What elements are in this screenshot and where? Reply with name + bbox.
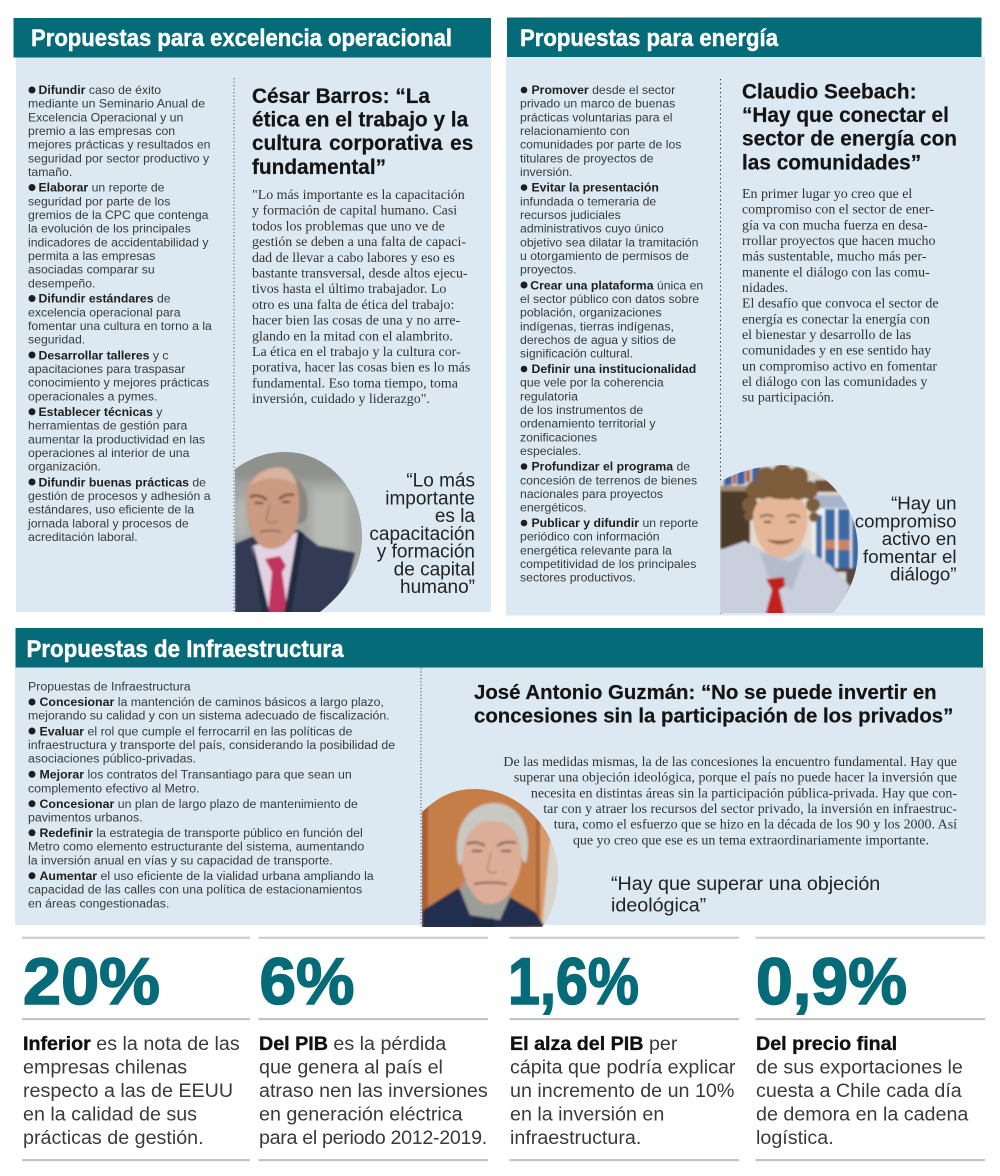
proposals list: energía: Definir una institucionalidad bbox=[532, 362, 696, 376]
proposals list: excelencia operacional: premio a las empresas con bbox=[28, 124, 175, 138]
quote text: Claudio Seebach: energía es conectar la energía con bbox=[742, 312, 930, 327]
quote text: César Barros: bastante transversal, desde altos ejecu- bbox=[252, 266, 468, 282]
pull quote: José Antonio Guzmán: “Hay que superar una objeción bbox=[611, 873, 880, 895]
stat: 0,9%: Del precio final bbox=[756, 1033, 897, 1055]
proposals list: infraestructura: mejorando su calidad y con un sistema adecuado de fiscalización. bbox=[28, 709, 390, 723]
pull quote: Claudio Seebach: compromiso bbox=[855, 510, 956, 531]
quote text: Claudio Seebach: su participación. bbox=[742, 391, 834, 406]
proposals list: excelencia operacional: operaciones al interior de una bbox=[28, 446, 190, 460]
proposals list: energía: prácticas voluntarias para el bbox=[520, 110, 673, 124]
stat: 6%: Del PIB es la pérdida bbox=[259, 1033, 446, 1055]
quote text: César Barros: fundamental. Eso toma tiempo, toma bbox=[252, 376, 458, 391]
pull quote: César Barros: capacitación bbox=[369, 524, 475, 545]
proposals list: infraestructura: Concesionar la mantención de caminos básicos a largo plazo, bbox=[40, 695, 384, 709]
proposals list: excelencia operacional: Difundir buenas prácticas de bbox=[38, 475, 206, 489]
quote text: César Barros: gestión se deben a una falta de capaci- bbox=[252, 235, 466, 250]
proposals list: energía: Crear una plataforma única en bbox=[530, 278, 703, 292]
stat: 6%: 6% bbox=[260, 944, 354, 1018]
proposals list: excelencia operacional: asociadas comparar su bbox=[28, 263, 155, 277]
stat: 20% bbox=[22, 937, 250, 1161]
quote text: César Barros: "Lo más importante es la capacitación bbox=[252, 188, 465, 203]
heading: excelencia operacional: Propuestas para excelencia operacional bbox=[31, 25, 452, 52]
proposals list: excelencia operacional: mediante un Seminario Anual de bbox=[28, 97, 205, 111]
proposals list: infraestructura: asociaciones público-privadas. bbox=[28, 752, 196, 766]
heading: energía: Propuestas para energía bbox=[520, 25, 779, 52]
pull quote: Claudio Seebach: “Hay un bbox=[891, 492, 956, 514]
heading: infraestructura bbox=[16, 628, 983, 668]
proposals list: energía: infundada o temeraria de bbox=[520, 194, 656, 208]
proposals list: energía: ordenamiento territorial y bbox=[520, 417, 656, 431]
proposals list: excelencia operacional: fomentar una cultura en torno a la bbox=[28, 319, 212, 333]
stat: 20%: en la calidad de sus bbox=[23, 1104, 197, 1126]
stat: 1,6%: El alza del PIB per bbox=[510, 1033, 677, 1055]
stat: 1,6% bbox=[508, 937, 739, 1161]
proposals list: energía: competitividad de los principales bbox=[520, 557, 696, 571]
proposals list: energía: titulares de proyectos de bbox=[520, 151, 654, 165]
quote text: José Antonio Guzmán: tar con y atraer los recursos del sector privado, la inversión en infraestruc- bbox=[543, 802, 957, 817]
panel: energía bbox=[506, 18, 985, 620]
stat: 1,6%: en la inversión en bbox=[510, 1104, 664, 1126]
proposals list: infraestructura: capacidad de las calles con una política de estacionamientos bbox=[28, 883, 362, 897]
headline: César Barros: cultura corporativa es bbox=[252, 132, 473, 155]
proposals list: infraestructura: pavimentos urbanos. bbox=[28, 811, 143, 825]
stat: 0,9% bbox=[756, 937, 985, 1161]
proposals list: infraestructura: Concesionar un plan de largo plazo de mantenimiento de bbox=[40, 797, 358, 811]
proposals list: excelencia operacional: estándares, uso eficiente de la bbox=[28, 503, 194, 517]
quote text: José Antonio Guzmán: superar una objeción ideológica, porque el país no puede hacer la inversión que bbox=[514, 771, 957, 786]
proposals list: excelencia operacional: excelencia operacional para bbox=[28, 305, 181, 319]
stat: 6%: que genera al país el bbox=[259, 1056, 443, 1078]
proposals list: infraestructura: en áreas congestionadas. bbox=[28, 896, 169, 910]
panel: infraestructura bbox=[15, 628, 986, 931]
proposals list: energía: objetivo sea dilatar la tramitación bbox=[520, 235, 699, 249]
proposals list: energía: relacionamiento con bbox=[520, 124, 630, 138]
headline: César Barros: César Barros: “La bbox=[252, 85, 430, 108]
headline: José Antonio Guzmán: José Antonio Guzmán: “No se puede invertir en bbox=[474, 682, 937, 704]
stat: 6% bbox=[258, 937, 488, 1161]
proposals list: infraestructura: la inversión anual en vías y su capacidad de transporte. bbox=[28, 853, 333, 867]
proposals list: excelencia operacional: organización. bbox=[28, 460, 101, 474]
proposals list: infraestructura bbox=[28, 679, 395, 910]
stat: 6%: atraso nen las inversiones bbox=[259, 1080, 488, 1102]
stat: 0,9%: de sus exportaciones le bbox=[756, 1056, 963, 1078]
heading: infraestructura: Propuestas de Infraestructura bbox=[26, 636, 344, 663]
headline: Claudio Seebach: sector de energía con bbox=[742, 128, 957, 151]
proposals list: excelencia operacional: aumentar la productividad en las bbox=[28, 432, 205, 446]
proposals list: infraestructura: Mejorar los contratos del Transantiago para que sean un bbox=[40, 768, 352, 782]
photo: César Barros bbox=[235, 452, 362, 612]
stat: 1,6%: cápita que podría explicar bbox=[510, 1056, 736, 1078]
proposals list: energía: zonificaciones bbox=[520, 430, 597, 444]
proposals list: energía: nacionales para proyectos bbox=[520, 487, 663, 501]
quote text: César Barros: tivos hasta el último trabajador. Lo bbox=[252, 282, 446, 297]
quote text: César Barros: hacer bien las cosas de una y no arre- bbox=[252, 314, 461, 329]
quote text: César Barros: La ética en el trabajo y la cultura cor- bbox=[252, 345, 461, 360]
stat: 6%: para el periodo 2012-2019. bbox=[259, 1127, 487, 1149]
proposals list: energía: Evitar la presentación bbox=[532, 181, 659, 195]
pull quote: César Barros: y formación bbox=[377, 542, 475, 562]
pull quote: César Barros: humano” bbox=[400, 577, 475, 598]
proposals list: energía: de los instrumentos de bbox=[520, 403, 643, 417]
quote text: Claudio Seebach: El desafío que convoca el sector de bbox=[742, 297, 939, 312]
proposals list: energía: energéticos. bbox=[520, 501, 587, 515]
proposals list: excelencia operacional: gestión de procesos y adhesión a bbox=[28, 489, 211, 503]
proposals list: energía: que vele por la coherencia bbox=[520, 376, 664, 390]
proposals list: energía: indígenas, tierras indígenas, bbox=[520, 319, 674, 333]
proposals list: energía: privado un marco de buenas bbox=[520, 97, 675, 111]
proposals list: infraestructura: Redefinir la estrategia de transporte público en función del bbox=[40, 826, 363, 840]
stat: 1,6%: 1,6% bbox=[508, 944, 639, 1018]
proposals list: energía: administrativos cuyo único bbox=[520, 222, 664, 236]
proposals list: energía: Profundizar el programa de bbox=[532, 460, 690, 474]
proposals list: excelencia operacional bbox=[27, 83, 212, 544]
quote text: César Barros: porativa, hacer las cosas bien es lo más bbox=[252, 361, 470, 376]
proposals list: energía: especiales. bbox=[520, 444, 581, 458]
proposals list: excelencia operacional: Establecer técnicas y bbox=[38, 405, 162, 419]
proposals list: energía: proyectos. bbox=[520, 263, 577, 277]
pull quote: Claudio Seebach: activo en bbox=[882, 528, 956, 549]
proposals list: excelencia operacional: gremios de la CPC que contenga bbox=[28, 208, 209, 222]
proposals list: energía: recursos judiciales bbox=[520, 208, 621, 222]
proposals list: energía: el sector público con datos sobre bbox=[520, 292, 699, 306]
proposals list: energía: periódico con información bbox=[520, 530, 660, 544]
proposals list: excelencia operacional: desempeño. bbox=[28, 276, 95, 290]
photo: José Antonio Guzmán bbox=[422, 789, 558, 927]
headline: José Antonio Guzmán: concesiones sin la participación de los privados” bbox=[474, 706, 953, 728]
proposals list: excelencia operacional: conocimiento y mejores prácticas bbox=[28, 376, 209, 390]
headline: César Barros: fundamental” bbox=[252, 156, 386, 179]
stat: 20%: respecto a las de EEUU bbox=[23, 1080, 233, 1102]
proposals list: excelencia operacional: Difundir caso de éxito bbox=[38, 83, 161, 97]
proposals list: excelencia operacional: Excelencia Operacional y un bbox=[28, 110, 183, 124]
proposals list: infraestructura: complemento efectivo al Metro. bbox=[28, 781, 200, 795]
proposals list: excelencia operacional: indicadores de accidentabilidad y bbox=[28, 235, 209, 249]
pull quote: José Antonio Guzmán: ideológica” bbox=[611, 895, 706, 917]
proposals list: infraestructura: Propuestas de Infraestructura bbox=[28, 679, 191, 693]
quote text: José Antonio Guzmán: tura, como el esfuerzo que se hizo en la década de los 90 y los 2000. Así bbox=[554, 818, 957, 833]
proposals list: energía: Publicar y difundir un reporte bbox=[532, 516, 698, 530]
proposals list: excelencia operacional: Desarrollar talleres y c bbox=[38, 348, 169, 362]
pull quote: Claudio Seebach: fomentar el bbox=[863, 546, 956, 567]
quote text: José Antonio Guzmán: necesita en distintas áreas sin la participación pública-privada. Hay que con- bbox=[531, 786, 957, 801]
pull quote: César Barros: “Lo más bbox=[406, 470, 475, 492]
stat: 0,9%: logística. bbox=[756, 1127, 834, 1149]
quote text: Claudio Seebach: comunidades y en ese sentido hay bbox=[742, 344, 931, 359]
proposals list: energía: concesión de terrenos de bienes bbox=[520, 473, 697, 487]
pull quote: Claudio Seebach: diálogo” bbox=[890, 564, 956, 584]
headline: Claudio Seebach: “Hay que conectar el bbox=[742, 104, 949, 127]
proposals list: energía: sectores productivos. bbox=[520, 571, 636, 585]
panel: excelencia operacional bbox=[14, 18, 491, 616]
quote text: José Antonio Guzmán: De las medidas mismas, la de las concesiones la encuentro fundamental. Hay que bbox=[503, 755, 957, 770]
pull quote: César Barros: es la bbox=[435, 506, 475, 527]
proposals list: energía: población, organizaciones bbox=[520, 306, 662, 320]
proposals list: energía bbox=[520, 83, 703, 585]
proposals list: energía: comunidades por parte de los bbox=[520, 138, 681, 152]
proposals list: excelencia operacional: Difundir estándares de bbox=[38, 292, 171, 306]
stat: 0,9%: de demora en la cadena bbox=[756, 1104, 968, 1126]
headline: Claudio Seebach: las comunidades” bbox=[742, 151, 921, 174]
proposals list: excelencia operacional: Elaborar un reporte de bbox=[38, 181, 164, 195]
stat: 20%: empresas chilenas bbox=[23, 1056, 187, 1078]
proposals list: energía: energética relevante para la bbox=[520, 543, 672, 557]
proposals list: excelencia operacional: apacitaciones para traspasar bbox=[28, 362, 185, 376]
proposals list: infraestructura: infraestructura y transporte del país, considerando la posibilidad de bbox=[28, 738, 395, 752]
proposals list: energía: inversión. bbox=[520, 165, 572, 179]
quote text: Claudio Seebach: el bienestar y desarrollo de las bbox=[742, 328, 911, 343]
proposals list: excelencia operacional: mejores prácticas y resultados en bbox=[28, 138, 211, 152]
proposals list: energía: Promover desde el sector bbox=[532, 83, 675, 97]
stat: 0,9%: cuesta a Chile cada día bbox=[756, 1080, 962, 1102]
quote text: Claudio Seebach: un compromiso activo en fomentar bbox=[742, 359, 937, 374]
proposals list: excelencia operacional: permita a las empresas bbox=[28, 249, 155, 263]
headline: Claudio Seebach: Claudio Seebach: bbox=[742, 80, 916, 104]
proposals list: energía: derechos de agua y sitios de bbox=[520, 333, 676, 347]
quote text: Claudio Seebach: rrollar proyectos que hacen mucho bbox=[742, 234, 936, 249]
quote text: Claudio Seebach: más sustentable, mucho más per- bbox=[742, 250, 927, 265]
proposals list: excelencia operacional: seguridad por sector productivo y bbox=[28, 151, 210, 165]
proposals list: excelencia operacional: jornada laboral y procesos de bbox=[27, 516, 189, 530]
quote text: César Barros: otro es una falta de ética del trabajo: bbox=[252, 298, 454, 313]
stat: 1,6%: un incremento de un 10% bbox=[510, 1080, 734, 1102]
stat: 20%: 20% bbox=[23, 944, 160, 1018]
proposals list: infraestructura: Aumentar el uso eficiente de la vialidad urbana ampliando la bbox=[40, 869, 374, 883]
proposals list: energía: u otorgamiento de permisos de bbox=[520, 249, 689, 263]
quote text: César Barros: inversión, cuidado y liderazgo". bbox=[252, 392, 430, 407]
proposals list: excelencia operacional: la evolución de los principales bbox=[28, 222, 191, 236]
quote text: Claudio Seebach: gía va con mucha fuerza en desa- bbox=[742, 218, 928, 233]
quote text: Claudio Seebach: En primer lugar yo creo que el bbox=[742, 187, 912, 202]
proposals list: excelencia operacional: seguridad por parte de los bbox=[28, 194, 170, 208]
quote text: César Barros: glando en la mitad con el alambrito. bbox=[252, 329, 453, 344]
proposals list: energía: regulatoria bbox=[520, 389, 578, 403]
quote text: Claudio Seebach: compromiso con el sector de ener- bbox=[742, 203, 934, 218]
quote text: José Antonio Guzmán: que yo creo que ese es un tema extraordinariamente importante. bbox=[573, 833, 929, 848]
quote text: Claudio Seebach: nidades. bbox=[742, 281, 788, 296]
proposals list: excelencia operacional: operacionales a pymes. bbox=[28, 389, 157, 403]
proposals list: excelencia operacional: herramientas de gestión para bbox=[28, 419, 188, 433]
proposals list: excelencia operacional: tamaño. bbox=[28, 165, 72, 179]
proposals list: energía: significación cultural. bbox=[520, 347, 633, 361]
stat: 6%: en generación eléctrica bbox=[259, 1104, 463, 1126]
stat: 0,9%: 0,9% bbox=[756, 944, 907, 1018]
proposals list: infraestructura: Metro como elemento estructurante del sistema, aumentando bbox=[28, 840, 364, 854]
heading: excelencia operacional bbox=[14, 18, 491, 58]
stat: 1,6%: infraestructura. bbox=[510, 1127, 641, 1149]
headline: César Barros: ética en el trabajo y la bbox=[252, 109, 469, 132]
stat: 20%: prácticas de gestión. bbox=[23, 1127, 204, 1149]
quote text: César Barros: y formación de capital humano. Casi bbox=[252, 204, 457, 219]
quote text: Claudio Seebach: el diálogo con las comunidades y bbox=[742, 375, 927, 390]
pull quote: César Barros: importante bbox=[385, 488, 475, 509]
quote text: Claudio Seebach: manente el diálogo con las comu- bbox=[742, 265, 930, 280]
quote text: César Barros: todos los problemas que uno ve de bbox=[252, 219, 445, 234]
proposals list: excelencia operacional: acreditación laboral. bbox=[28, 530, 138, 544]
proposals list: infraestructura: Evaluar el rol que cumple el ferrocarril en las políticas de bbox=[40, 724, 352, 738]
proposals list: excelencia operacional: seguridad. bbox=[28, 333, 85, 347]
stat: 20%: Inferior es la nota de las bbox=[23, 1033, 240, 1055]
photo: Claudio Seebach bbox=[720, 465, 858, 613]
quote text: César Barros: dad de llevar a cabo labores y eso es bbox=[252, 251, 455, 266]
heading: energía bbox=[507, 18, 982, 57]
pull quote: César Barros: de capital bbox=[394, 559, 475, 580]
